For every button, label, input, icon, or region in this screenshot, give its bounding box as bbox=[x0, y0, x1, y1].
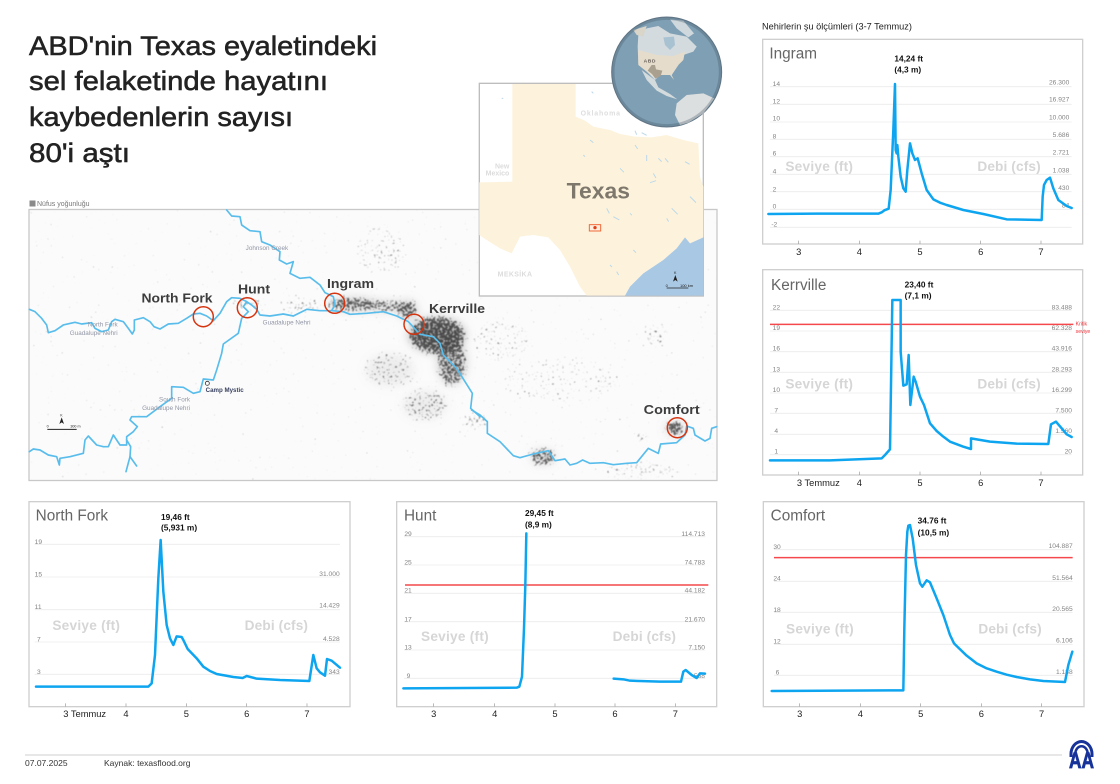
right axis: flow: 20.565 bbox=[1052, 606, 1073, 613]
x axis: 3 bbox=[431, 709, 436, 719]
axis watermarks: Seviye (ft) bbox=[421, 629, 489, 644]
x axis: 7 bbox=[1038, 478, 1044, 488]
river names and Camp Mystic: Guadalupe Nehri bbox=[70, 330, 118, 337]
x axis: 6 bbox=[979, 709, 984, 719]
axis watermarks bbox=[785, 377, 1041, 392]
panel: Kerrville chart bbox=[763, 270, 1090, 488]
x axis: 5 bbox=[552, 709, 558, 719]
level curve, before gauge failure bbox=[403, 533, 526, 688]
left axis: level bbox=[404, 531, 412, 680]
x axis: 6 bbox=[978, 247, 983, 257]
x axis bbox=[797, 472, 1044, 488]
panel: Texas inset map bbox=[479, 83, 703, 296]
level curve, after gauge recovery bbox=[614, 670, 705, 682]
axis watermarks: Debi (cfs) bbox=[978, 621, 1042, 636]
left axis: level bbox=[771, 81, 780, 229]
title: sel felaketinde hayatını bbox=[29, 66, 328, 96]
right axis: flow: 84 bbox=[1062, 203, 1070, 210]
river names and Camp Mystic bbox=[70, 245, 311, 412]
x axis: 6 bbox=[612, 709, 618, 719]
left axis: level bbox=[35, 539, 42, 676]
x axis: 7 bbox=[673, 709, 678, 719]
left axis: level: 1 bbox=[774, 449, 778, 456]
right axis: flow: 21.670 bbox=[685, 616, 705, 623]
x axis: 7 bbox=[1039, 709, 1044, 719]
axis watermarks bbox=[52, 618, 308, 633]
critical level line bbox=[405, 583, 708, 587]
city labels: Ingram bbox=[327, 276, 374, 291]
x axis: 6 bbox=[978, 478, 983, 488]
footer: 07.07.2025 bbox=[25, 758, 68, 768]
right axis: flow: 26.300 bbox=[1049, 79, 1070, 86]
rivers west part bbox=[29, 210, 480, 472]
x axis: 3 Temmuz bbox=[797, 478, 840, 488]
level curve bbox=[772, 525, 1072, 691]
label: New Mexico: Mexico bbox=[486, 171, 509, 178]
right axis: flow: 343 bbox=[329, 669, 340, 676]
right axis: flow: 51.564 bbox=[1052, 575, 1073, 582]
North America land bbox=[638, 26, 697, 80]
left axis: level: 22 bbox=[773, 304, 780, 311]
icon: AA logo bbox=[1069, 740, 1094, 773]
left axis: level: -2 bbox=[771, 222, 778, 229]
left axis: level: 12 bbox=[773, 639, 781, 646]
peak label: (8,9 m) bbox=[525, 519, 552, 529]
left axis: level: 13 bbox=[404, 644, 412, 651]
axis watermarks bbox=[785, 159, 1041, 174]
peak label: 34.76 ft bbox=[918, 516, 947, 526]
left axis: level: 7 bbox=[37, 636, 41, 643]
right axis: flow: 31.000 bbox=[319, 571, 340, 578]
x axis: 4 bbox=[857, 478, 862, 488]
left axis: level: 2 bbox=[773, 186, 777, 193]
scale bar and north arrow bbox=[47, 413, 81, 429]
USA bbox=[638, 50, 685, 80]
x axis: 5 bbox=[917, 247, 923, 257]
left axis: level: 14 bbox=[773, 81, 780, 88]
inset scale and north arrow bbox=[666, 271, 694, 288]
panel: Comfort chart bbox=[763, 502, 1084, 719]
right axis: flow: 14.429 bbox=[319, 603, 340, 610]
right axis: flow: 104.887 bbox=[1049, 543, 1073, 550]
left axis: level: 19 bbox=[773, 325, 780, 332]
x axis bbox=[796, 241, 1044, 257]
right axis: flow bbox=[1049, 543, 1073, 676]
right axis: flow: 2.721 bbox=[1053, 150, 1070, 157]
left axis: level: 9 bbox=[407, 673, 411, 680]
x axis: 3 Temmuz bbox=[63, 709, 106, 719]
x axis: 6 bbox=[244, 709, 249, 719]
x axis: 3 bbox=[796, 247, 801, 257]
axis watermarks: Seviye (ft) bbox=[52, 618, 120, 633]
title: 80'i aştı bbox=[29, 138, 130, 168]
right axis: flow: 430 bbox=[1058, 185, 1070, 192]
label: Oklahoma: Oklahoma bbox=[581, 111, 620, 118]
left axis: level: 10 bbox=[773, 116, 780, 123]
city labels: Comfort bbox=[644, 402, 700, 417]
left axis: level: 7 bbox=[774, 407, 778, 414]
left axis: level: 16 bbox=[773, 346, 780, 353]
right axis: flow: 7.500 bbox=[1055, 407, 1072, 414]
title: Comfort: Comfort bbox=[771, 507, 826, 524]
river names and Camp Mystic: North Fork bbox=[88, 322, 118, 329]
peak label: (7,1 m) bbox=[905, 291, 932, 301]
peak label: 23,40 ft bbox=[905, 279, 934, 289]
label: Texas: Texas bbox=[567, 179, 630, 204]
city labels: North Fork bbox=[142, 291, 213, 306]
label: New Mexico: New bbox=[495, 163, 510, 170]
left axis: level: 25 bbox=[404, 560, 412, 567]
right axis: flow: 28.293 bbox=[1052, 366, 1072, 373]
icon: globe bbox=[612, 17, 722, 127]
x axis: 7 bbox=[1038, 247, 1044, 257]
x axis bbox=[63, 703, 310, 719]
scale bar and north arrow: 0 bbox=[47, 425, 49, 429]
axis watermarks: Seviye (ft) bbox=[785, 377, 853, 392]
level curve bbox=[768, 84, 1072, 220]
right axis: flow: 5.686 bbox=[1053, 132, 1070, 139]
right axis: flow: 74.783 bbox=[685, 560, 705, 567]
critical level line bbox=[770, 322, 1073, 327]
label: Mexico: MEKSİKA bbox=[498, 270, 532, 278]
axis watermarks: Debi (cfs) bbox=[245, 618, 308, 633]
peak label: 14,24 ft bbox=[894, 54, 923, 64]
right axis: flow bbox=[319, 571, 340, 676]
axis watermarks: Debi (cfs) bbox=[977, 377, 1041, 392]
left axis: level: 4 bbox=[774, 428, 778, 435]
right axis: flow: 7.150 bbox=[688, 644, 705, 651]
left axis: level: 10 bbox=[773, 387, 780, 394]
Gulf of Mexico bbox=[625, 237, 703, 296]
title: ABD'nin Texas eyaletindeki bbox=[29, 31, 377, 61]
inset scale and north arrow: K bbox=[674, 271, 677, 275]
left axis: level: 8 bbox=[773, 133, 777, 140]
left axis: level: 13 bbox=[773, 366, 780, 373]
x axis bbox=[431, 703, 678, 719]
icon: AA logo: AA bbox=[1069, 748, 1094, 773]
axis watermarks: Debi (cfs) bbox=[977, 159, 1041, 174]
location marker circles bbox=[193, 293, 687, 438]
small water marks bbox=[502, 92, 696, 275]
right axis: flow: 16.299 bbox=[1052, 387, 1072, 394]
city labels bbox=[142, 276, 700, 417]
left axis: level: 29 bbox=[404, 531, 412, 538]
peak label: (4,3 m) bbox=[894, 65, 921, 75]
left axis: level: 19 bbox=[35, 539, 42, 546]
right axis: flow bbox=[1049, 79, 1070, 210]
river east part bbox=[472, 410, 717, 465]
left axis: level bbox=[773, 544, 781, 677]
x axis: 4 bbox=[858, 709, 863, 719]
left axis: level: 30 bbox=[773, 544, 781, 551]
left axis: level: 4 bbox=[773, 169, 777, 176]
title: kaybedenlerin sayısı bbox=[29, 102, 293, 132]
axis watermarks: Seviye (ft) bbox=[785, 159, 853, 174]
flood area marker bbox=[589, 225, 601, 231]
scale bar and north arrow: 300 m bbox=[70, 425, 81, 429]
x axis: 5 bbox=[918, 709, 923, 719]
right axis: flow: 43.916 bbox=[1052, 346, 1072, 353]
footer: Kaynak: texasflood.org bbox=[104, 758, 191, 768]
left axis: level: 24 bbox=[773, 576, 781, 583]
Texas shape bbox=[479, 84, 703, 296]
title bbox=[29, 31, 377, 168]
city labels: Kerrville bbox=[429, 301, 485, 316]
x axis: 4 bbox=[123, 709, 129, 719]
title: North Fork: North Fork bbox=[36, 508, 108, 525]
right axis: flow: 568 bbox=[694, 673, 705, 680]
peak label: 29,45 ft bbox=[525, 508, 554, 518]
scale bar and north arrow: K bbox=[60, 413, 63, 417]
city labels: Hunt bbox=[238, 282, 271, 296]
right axis: flow: 44.182 bbox=[685, 588, 705, 595]
left axis: level: 21 bbox=[404, 588, 412, 595]
panel: North Fork chart bbox=[29, 502, 350, 719]
level curve bbox=[36, 540, 340, 687]
South America bbox=[675, 93, 714, 125]
right axis: flow: 10.000 bbox=[1049, 114, 1070, 121]
left axis: level: 18 bbox=[773, 607, 781, 614]
right axis: flow: 16.927 bbox=[1049, 97, 1070, 104]
x axis: 5 bbox=[184, 709, 189, 719]
right axis: flow bbox=[1052, 304, 1072, 456]
left axis: level: 3 bbox=[37, 669, 41, 676]
x axis bbox=[797, 703, 1044, 719]
right axis: flow: 6.106 bbox=[1056, 638, 1073, 645]
title: Kerrville: Kerrville bbox=[771, 277, 826, 294]
right axis: flow bbox=[681, 531, 705, 680]
left axis: level bbox=[773, 304, 780, 456]
x axis: 3 bbox=[797, 709, 802, 719]
right axis: flow: 62.328 bbox=[1052, 325, 1072, 332]
axis watermarks: Debi (cfs) bbox=[613, 629, 676, 644]
panel: Hunt chart bbox=[397, 502, 717, 719]
right axis: flow: 4.528 bbox=[323, 636, 340, 643]
peak label: (5,931 m) bbox=[161, 523, 197, 533]
level curve bbox=[770, 300, 1072, 460]
legend: population density: Nüfus yoğunluğu bbox=[37, 201, 90, 208]
axis watermarks: Seviye (ft) bbox=[786, 621, 854, 636]
river names and Camp Mystic: Guadalupe Nehri bbox=[263, 319, 311, 326]
inset scale and north arrow: 100 km bbox=[680, 283, 694, 288]
critical level label: seviye bbox=[1076, 329, 1090, 335]
peak label: (10,5 m) bbox=[918, 527, 949, 537]
right axis: flow: 1.560 bbox=[1055, 428, 1072, 435]
critical level line bbox=[774, 555, 1073, 560]
panel: Ingram chart bbox=[763, 39, 1083, 257]
x axis: 5 bbox=[917, 478, 923, 488]
right axis: flow: 1.038 bbox=[1053, 167, 1070, 174]
right axis: flow: 83.488 bbox=[1052, 304, 1072, 311]
icon: globe: ABD bbox=[644, 58, 656, 64]
footer bbox=[25, 755, 1062, 768]
right axis: flow: 114.713 bbox=[681, 531, 705, 538]
river names and Camp Mystic: Guadalupe Nehri bbox=[142, 405, 190, 412]
critical level label: Kritik bbox=[1076, 321, 1088, 327]
panel: main map bbox=[29, 210, 717, 480]
river names and Camp Mystic: Camp Mystic bbox=[206, 387, 244, 394]
left axis: level: 6 bbox=[773, 151, 777, 158]
axis watermarks bbox=[786, 621, 1042, 636]
x axis: 4 bbox=[492, 709, 497, 719]
river names and Camp Mystic: Johnson Creek bbox=[246, 245, 289, 252]
left axis: level: 12 bbox=[773, 98, 780, 105]
left axis: level: 0 bbox=[773, 204, 777, 211]
section heading: Nehirlerin şu ölçümleri (3-7 Temmuz) bbox=[762, 22, 912, 32]
Texas on globe bbox=[648, 65, 662, 79]
left axis: level: 17 bbox=[404, 616, 412, 623]
right axis: flow: 1.188 bbox=[1056, 669, 1073, 676]
left axis: level: 11 bbox=[35, 604, 42, 611]
river names and Camp Mystic: South Fork bbox=[159, 397, 191, 404]
right axis: flow: 20 bbox=[1065, 449, 1072, 456]
title: Hunt: Hunt bbox=[404, 508, 437, 525]
title: Ingram: Ingram bbox=[769, 46, 817, 63]
left axis: level: 6 bbox=[776, 670, 780, 677]
x axis: 4 bbox=[857, 247, 862, 257]
Central America bbox=[642, 70, 677, 99]
left axis: level: 15 bbox=[35, 571, 42, 578]
x axis: 7 bbox=[304, 709, 310, 719]
peak label: 19,46 ft bbox=[161, 512, 190, 522]
axis watermarks bbox=[421, 629, 676, 644]
inset scale and north arrow: 0 bbox=[666, 283, 669, 288]
